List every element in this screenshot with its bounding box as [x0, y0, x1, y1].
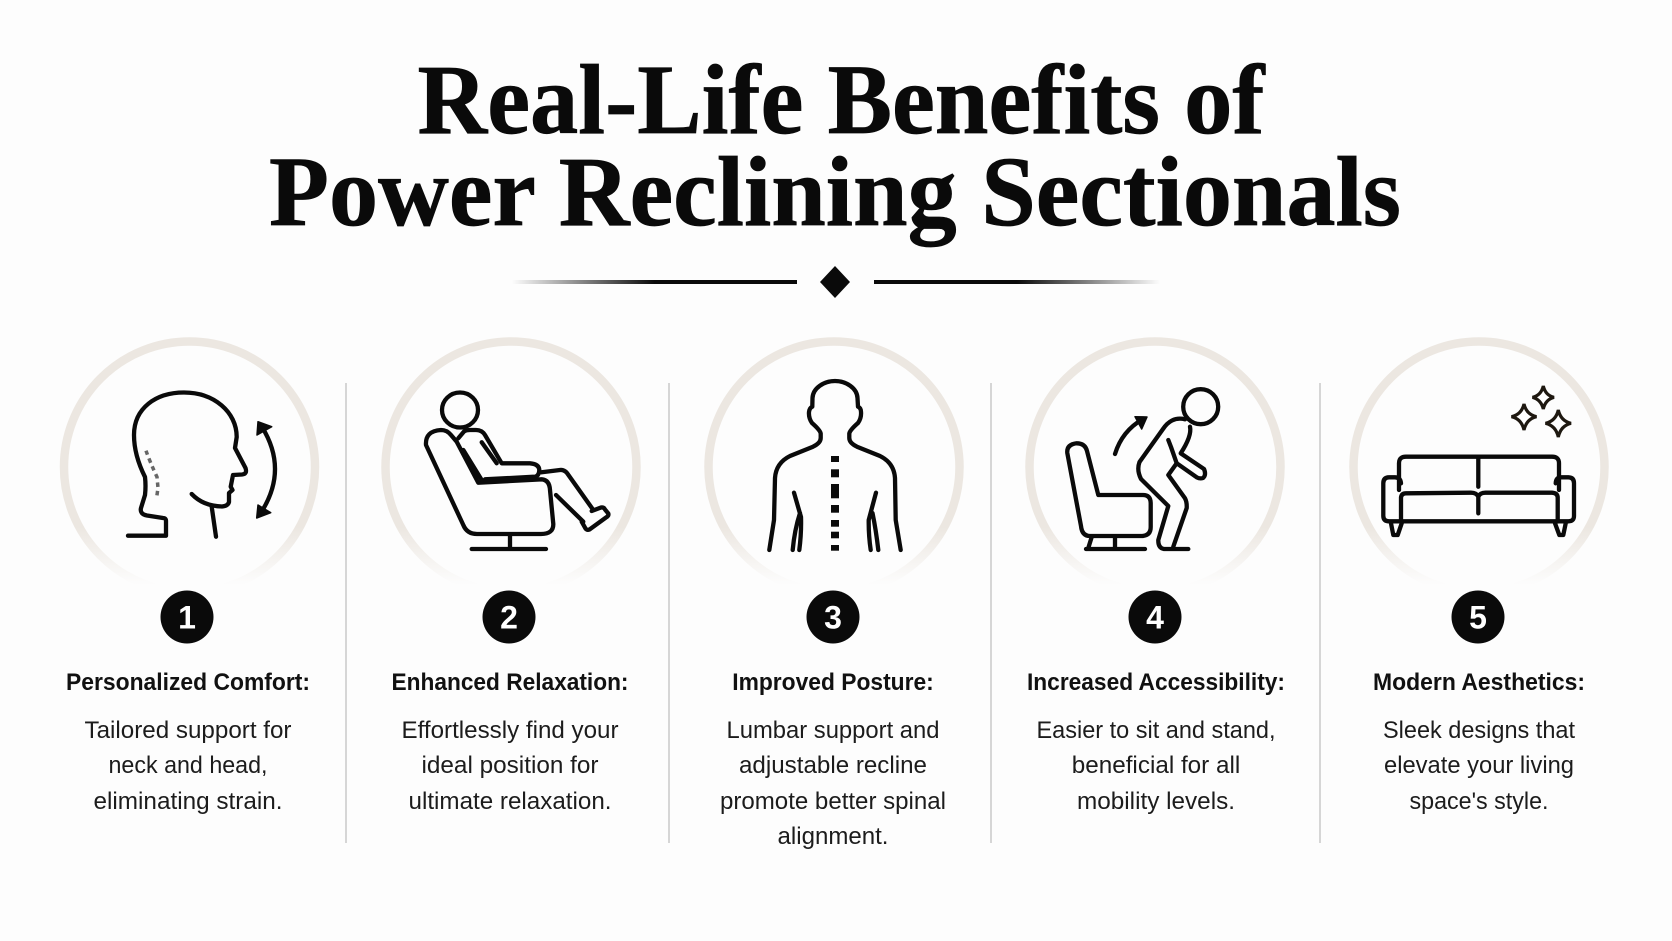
- title: [269, 44, 1401, 247]
- number badge 2: [482, 590, 536, 644]
- icon: person reclining in chair: [426, 392, 608, 549]
- number badge 3: 3: [824, 600, 842, 636]
- title: Real-Life Benefits of: [418, 44, 1266, 155]
- description: Effortlessly find your: [402, 717, 618, 744]
- description: promote better spinal: [720, 788, 946, 815]
- description: ideal position for: [422, 752, 598, 779]
- spine: [831, 456, 839, 551]
- description: Tailored support for: [84, 717, 292, 744]
- panel: improved posture: [708, 342, 960, 850]
- description: [402, 717, 618, 815]
- number badge 5: 5: [1469, 600, 1487, 636]
- description: elevate your living: [1384, 752, 1574, 779]
- description: alignment.: [778, 823, 888, 850]
- icon: person rising from chair: [1067, 389, 1218, 549]
- panel: personalized comfort: [64, 342, 315, 815]
- panel: enhanced relaxation: [386, 342, 636, 815]
- panel: increased accessibility: [1027, 342, 1285, 815]
- heading: Improved Posture:: [732, 669, 934, 696]
- heading: Personalized Comfort:: [66, 669, 310, 696]
- title: Power Reclining Sectionals: [269, 136, 1401, 247]
- panel: modern aesthetics: [1354, 342, 1604, 815]
- description: beneficial for all: [1072, 752, 1240, 779]
- description: mobility levels.: [1077, 788, 1235, 815]
- number badge 5: [1452, 590, 1504, 644]
- title ornament: rule with diamond: [512, 266, 1160, 298]
- description: adjustable recline: [739, 752, 927, 779]
- number badge 1: [160, 590, 214, 644]
- description: Easier to sit and stand,: [1036, 717, 1276, 744]
- icon: sofa: [1383, 457, 1574, 535]
- description: Sleek designs that: [1383, 717, 1575, 744]
- description: [1036, 717, 1276, 815]
- number badge 2: 2: [500, 600, 518, 636]
- description: neck and head,: [108, 752, 268, 779]
- number badge 4: [1128, 590, 1182, 644]
- description: Lumbar support and: [726, 717, 940, 744]
- description: [84, 717, 292, 815]
- description: ultimate relaxation.: [408, 788, 612, 815]
- icon: back with spine: [769, 381, 901, 551]
- number badge 4: 4: [1146, 600, 1164, 636]
- description: [1383, 717, 1575, 815]
- description: [720, 717, 946, 850]
- description: space's style.: [1410, 788, 1548, 815]
- heading: Increased Accessibility:: [1027, 669, 1285, 696]
- description: eliminating strain.: [94, 788, 282, 815]
- number badge 3: [806, 590, 860, 644]
- icon: head with neck support arrow: [128, 392, 275, 537]
- number badge 1: 1: [178, 600, 196, 636]
- icon: sparkles: [1512, 386, 1571, 437]
- heading: Enhanced Relaxation:: [392, 669, 628, 696]
- heading: Modern Aesthetics:: [1373, 669, 1585, 696]
